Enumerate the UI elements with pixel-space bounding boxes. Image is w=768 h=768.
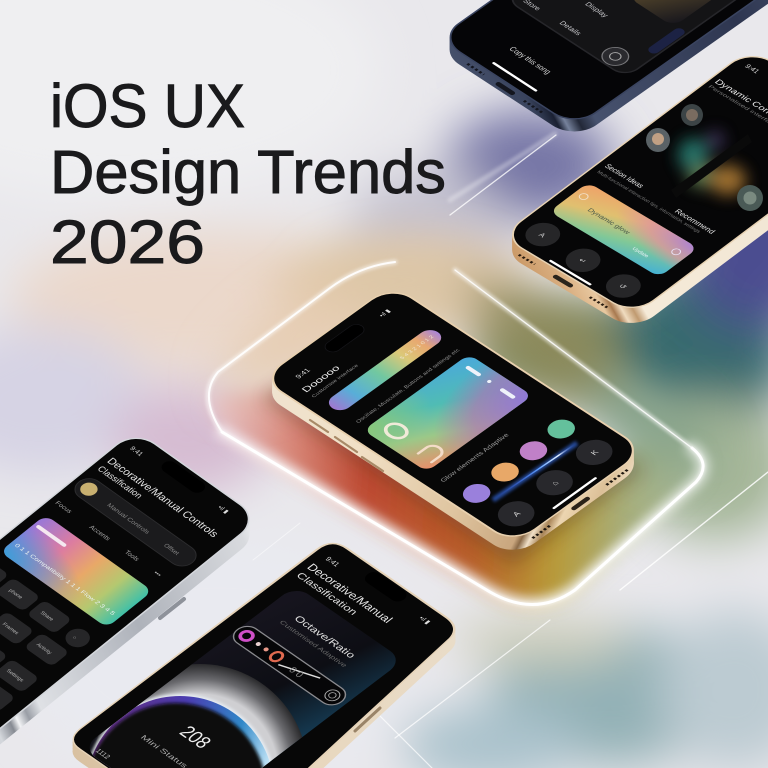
status and headings: Classification <box>293 571 359 617</box>
card: gradient controls: Update <box>630 247 650 259</box>
phone: top navy phone <box>437 0 768 140</box>
card: gradient controls: Dynamic glow <box>585 207 631 236</box>
phone: bottom cream phone <box>72 543 455 768</box>
phone screen <box>437 0 768 128</box>
phone screen: Display <box>583 0 611 19</box>
orb with avatars <box>646 104 763 211</box>
side buttons <box>310 420 383 471</box>
phone screen <box>0 429 261 756</box>
power button <box>160 599 184 618</box>
phone screen: •ıl ▮ <box>378 308 392 318</box>
key grid <box>0 555 96 714</box>
title: 2026 <box>50 208 205 276</box>
phone screen: Customise interface <box>311 363 360 399</box>
power button <box>355 708 380 731</box>
phone screen: ○ <box>71 635 78 641</box>
screen content: Octave/Ratio <box>291 614 358 661</box>
title: iOS UX <box>50 72 245 140</box>
status and headings: •ıl ▮ <box>417 615 432 626</box>
gradient pill <box>324 327 446 413</box>
phone screen: K <box>589 448 601 457</box>
phone screen: Copy this song <box>507 45 553 76</box>
phone screen: Glow elements Adaptive <box>439 432 511 484</box>
gradient card <box>0 515 153 628</box>
phone screen: Multi-functional interaction tips, information, settings <box>595 170 702 235</box>
phone screen: Decorative/Manual Controls <box>104 456 221 540</box>
phone screen: Share <box>38 610 55 622</box>
port and speaker <box>517 253 609 309</box>
sphere graphic <box>84 664 308 768</box>
glowing rounded panel outline <box>208 262 703 605</box>
screen content <box>84 599 382 768</box>
phone screen: Recommend <box>672 208 717 235</box>
phone screen: ⌂ <box>549 479 561 487</box>
control pill <box>228 623 351 709</box>
phone screen: phone <box>7 588 24 600</box>
phone screen <box>260 284 646 545</box>
phone screen: ↵ <box>576 257 588 265</box>
phone screen: 9:41 <box>743 64 760 75</box>
phone screen <box>500 48 768 316</box>
phone: bottom left silver phone <box>0 429 261 768</box>
card: gradient controls <box>549 182 698 277</box>
round dark buttons <box>516 218 650 303</box>
phone screen <box>74 544 453 768</box>
search pill: Offset <box>162 543 181 557</box>
status and headings: 9:41 <box>323 556 341 568</box>
phone screen: Classification <box>95 464 145 500</box>
phone: center gold phone <box>260 284 646 566</box>
port and speaker <box>465 62 545 115</box>
control pill: 0 0 <box>286 665 306 680</box>
phone screen: •ıl ▮ <box>216 505 230 515</box>
colour circles <box>455 416 583 507</box>
phone side <box>500 51 768 331</box>
status and headings <box>75 544 452 768</box>
screen content: Mini Status <box>138 733 190 768</box>
light streak lines <box>253 134 768 768</box>
gradient card <box>363 354 532 472</box>
phone body <box>72 543 455 768</box>
phone: top right phone <box>500 48 768 331</box>
phone side <box>437 0 768 140</box>
phone screen: Activity <box>35 642 53 656</box>
tabs: Accents <box>87 524 112 542</box>
phone side <box>0 432 261 768</box>
screen content: Customised Adaptive <box>277 619 349 669</box>
phone screen: 9:41 <box>128 446 144 458</box>
phone screen: Settings <box>5 668 25 683</box>
search pill <box>69 474 202 570</box>
port and speaker <box>531 469 629 539</box>
gradient card: 0 1 1 Compatibility 1 1 1 Flow 2 3 4 5 <box>13 543 116 617</box>
phone side <box>260 287 646 558</box>
phone screen: 9:41 <box>293 367 312 380</box>
phone screen: ↺ <box>617 283 628 291</box>
phone side <box>72 546 455 768</box>
tabs: Focus <box>53 500 73 515</box>
title <box>50 72 446 276</box>
drop shadow <box>262 306 645 566</box>
tabs: Tools <box>123 549 140 563</box>
warm colour inside glowing panel <box>210 385 703 605</box>
tabs: ••• <box>152 570 163 579</box>
phone screen: Dooooo <box>299 363 342 394</box>
phone screen: Frames <box>1 622 20 636</box>
screen content: 1112 <box>93 747 112 761</box>
phone screen: Section Ideas <box>603 162 646 190</box>
title: Design Trends <box>50 138 446 206</box>
status and headings: Decorative/Manual <box>304 562 394 625</box>
phone screen: Oscillate, Musculate, Buttons and settings etc <box>355 348 462 424</box>
phone screen: A <box>537 232 547 239</box>
phone screen: A <box>511 510 523 518</box>
tabs <box>53 500 163 579</box>
phone screen: Details <box>557 19 584 37</box>
search pill: Manual Controls <box>105 502 151 535</box>
blue light streak <box>493 443 577 500</box>
screen content: 208 <box>174 723 216 753</box>
gradient pill: 5 4 3 2 1 0 1 2 <box>399 334 436 361</box>
dark buttons <box>486 435 624 532</box>
